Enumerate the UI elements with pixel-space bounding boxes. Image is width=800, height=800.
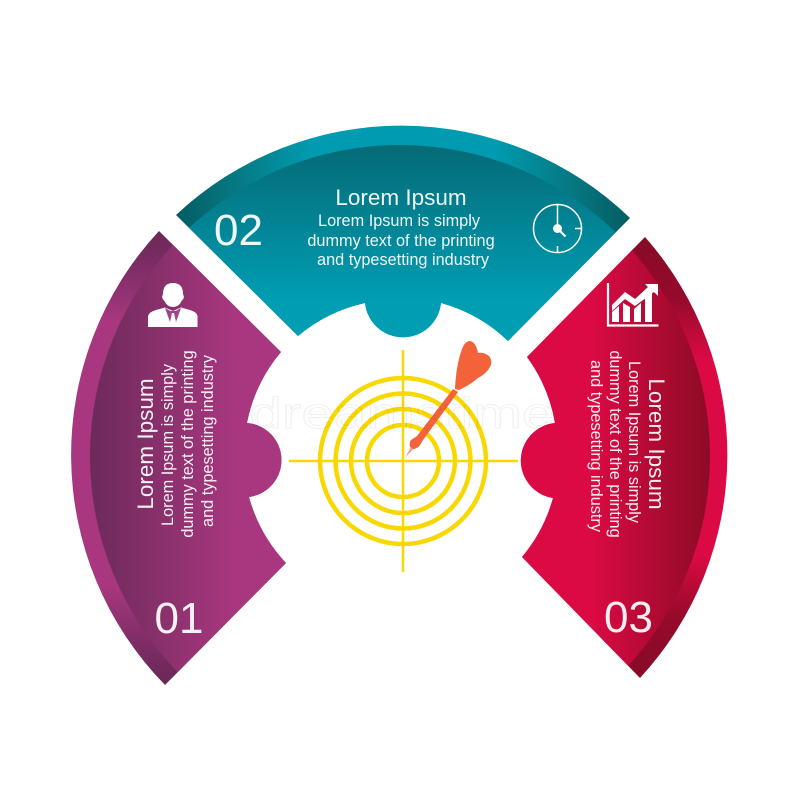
heading: step 01: Lorem Ipsum	[133, 378, 158, 510]
heading: step 03: Lorem Ipsum	[644, 378, 669, 510]
text block: step 01: dummy text of the printing	[179, 350, 197, 538]
heading: step 02: Lorem Ipsum	[335, 185, 467, 210]
panel: step 02 teal	[176, 126, 630, 341]
red segment shape	[520, 237, 728, 678]
infographic canvas	[71, 126, 728, 685]
number 01: 01	[155, 594, 203, 643]
text block: step 02: dummy text of the printing	[307, 232, 495, 250]
number 03: 03	[604, 593, 653, 642]
text block: step 02: and typesetting industry	[317, 251, 490, 269]
panel: step 01 purple	[71, 231, 286, 685]
text block: step 03	[587, 350, 643, 538]
icon: clock	[534, 204, 582, 252]
text block: step 01: Lorem Ipsum is simply	[159, 363, 177, 526]
text block: step 01	[159, 350, 217, 538]
panel: step 03 red	[520, 237, 728, 678]
text block: step 02: Lorem Ipsum is simply	[318, 212, 481, 230]
purple segment shape	[71, 231, 286, 685]
text block: step 03: and typesetting industry	[587, 360, 605, 533]
icon: dart	[405, 341, 491, 458]
icon: growth chart	[608, 283, 658, 326]
text block: step 01: and typesetting industry	[199, 354, 217, 527]
watermark: dreamstime	[250, 389, 554, 438]
teal segment shape	[176, 126, 630, 341]
text block: step 03: Lorem Ipsum is simply	[625, 361, 643, 524]
number 02: 02	[214, 206, 263, 255]
target with crosshair	[289, 350, 518, 572]
text block: step 02	[307, 212, 495, 269]
icon: businessman	[148, 283, 198, 327]
text block: step 03: dummy text of the printing	[606, 350, 624, 538]
